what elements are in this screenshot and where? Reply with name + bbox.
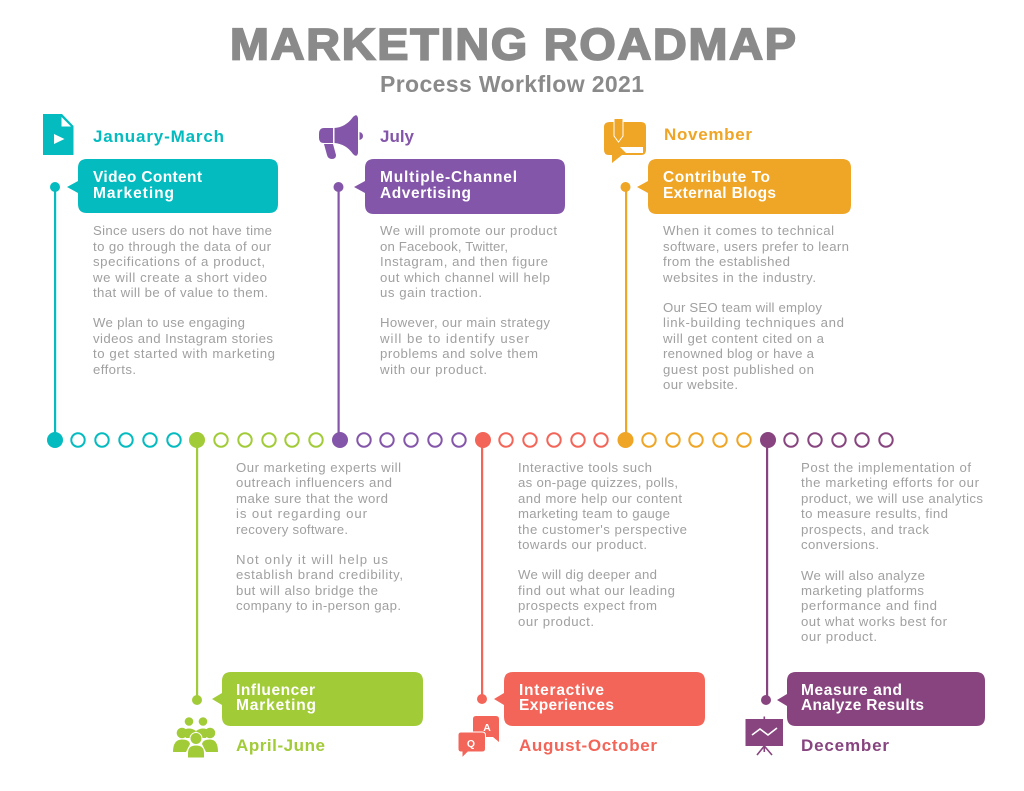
description text: However, our main strategy: [380, 315, 550, 330]
description text: is out regarding our: [236, 506, 368, 521]
panel: December: [746, 432, 985, 755]
description text: make sure that the word: [236, 491, 388, 506]
description text: [379, 223, 557, 377]
title bubble: Interactive: [519, 682, 604, 699]
description text: specifications of a product,: [93, 254, 265, 269]
description text: Our marketing experts will: [236, 460, 401, 475]
icon: video file: [43, 114, 74, 155]
panel: April-June: [173, 432, 423, 758]
description text: Since users do not have time: [93, 223, 272, 238]
panel: August-October: [458, 432, 705, 758]
title bubble: [354, 159, 565, 214]
description text: as on-page quizzes, polls,: [518, 475, 678, 490]
description text: Our SEO team will employ: [663, 300, 822, 315]
description text: prospects, and track: [801, 522, 929, 537]
panel: November: [604, 118, 851, 448]
month heading: July: [380, 127, 415, 146]
panel: July: [319, 115, 565, 448]
month heading: August-October: [519, 736, 657, 755]
month heading: April-June: [236, 736, 325, 755]
description text: product, we will use analytics: [801, 491, 983, 506]
description text: we will create a short video: [92, 270, 267, 285]
description text: efforts.: [93, 362, 136, 377]
title bubble: Contribute To: [663, 169, 770, 186]
description text: performance and find: [801, 598, 937, 613]
description text: videos and Instagram stories: [93, 331, 273, 346]
description text: to get started with marketing: [93, 346, 275, 361]
description text: We will dig deeper and: [518, 567, 657, 582]
title: MARKETING ROADMAP: [230, 20, 796, 69]
description text: link-building techniques and: [663, 315, 844, 330]
timeline dots: [71, 433, 893, 447]
title bubble: Marketing: [93, 185, 174, 202]
description text: prospects expect from: [518, 598, 657, 613]
description text: marketing platforms: [801, 583, 924, 598]
description text: websites in the industry.: [662, 270, 816, 285]
description text: Not only it will help us: [236, 552, 388, 567]
icon: book and pencil speech bubble: [604, 118, 646, 163]
description text: will get content cited on a: [662, 331, 825, 346]
description text: from the established: [663, 254, 790, 269]
timeline connector: January-March: [47, 182, 63, 448]
description text: Post the implementation of: [801, 460, 971, 475]
description text: the customer's perspective: [518, 522, 687, 537]
icon: megaphone: [319, 115, 363, 159]
title bubble: [777, 672, 985, 726]
title bubble: Marketing: [236, 697, 316, 714]
description text: towards our product.: [518, 537, 647, 552]
description text: that will be of value to them.: [93, 285, 268, 300]
title bubble: Influencer: [236, 682, 315, 699]
description text: guest post published on: [663, 362, 814, 377]
description text: and more help our content: [518, 491, 682, 506]
timeline connector: August-October: [475, 432, 491, 704]
title bubble: Analyze Results: [801, 697, 924, 714]
icon: Q and A speech bubbles: [458, 716, 499, 758]
description text: will be to identify user: [379, 331, 530, 346]
icon: group of people: [173, 717, 218, 758]
description text: We will also analyze: [801, 568, 925, 583]
description text: out what works best for: [801, 614, 948, 629]
icon: Q and A speech bubbles: Q: [467, 738, 475, 750]
month heading: November: [664, 125, 752, 144]
description text: our product.: [801, 629, 877, 644]
title bubble: Measure and: [801, 682, 902, 699]
icon: Q and A speech bubbles: A: [483, 722, 491, 734]
subtitle: Process Workflow 2021: [380, 71, 644, 97]
description text: find out what our leading: [518, 583, 675, 598]
description text: problems and solve them: [380, 346, 538, 361]
description text: renowned blog or have a: [663, 346, 815, 361]
timeline connector: July: [332, 182, 348, 448]
description text: on Facebook, Twitter,: [380, 239, 508, 254]
description text: software, users prefer to learn: [663, 239, 849, 254]
month heading: January-March: [93, 127, 224, 146]
title bubble: [212, 672, 423, 726]
description text: establish brand credibility,: [236, 567, 403, 582]
description text: [662, 223, 849, 392]
description text: us gain traction.: [380, 285, 482, 300]
timeline connector: November: [618, 182, 634, 448]
description text: company to in-person gap.: [236, 598, 401, 613]
description text: We plan to use engaging: [93, 315, 245, 330]
title bubble: Video Content: [93, 169, 202, 186]
description text: marketing team to gauge: [518, 506, 670, 521]
description text: We will promote our product: [380, 223, 557, 238]
description text: When it comes to technical: [663, 223, 834, 238]
description text: to go through the data of our: [93, 239, 272, 254]
title bubble: [67, 159, 278, 213]
icon: presentation board: [746, 716, 783, 755]
description text: the marketing efforts for our: [801, 475, 980, 490]
description text: Instagram, and then figure: [380, 254, 548, 269]
title bubble: [637, 159, 851, 214]
timeline connector: December: [760, 432, 776, 705]
description text: [236, 460, 403, 613]
title bubble: Experiences: [519, 697, 614, 714]
panel: January-March: [43, 114, 278, 448]
description text: recovery software.: [236, 522, 348, 537]
month heading: December: [801, 736, 889, 755]
description text: our website.: [663, 377, 738, 392]
title bubble: [494, 672, 705, 726]
description text: [518, 460, 687, 629]
description text: [92, 223, 275, 377]
description text: our product.: [518, 614, 594, 629]
title bubble: Advertising: [380, 185, 471, 202]
description text: with our product.: [379, 362, 487, 377]
timeline connector: April-June: [189, 432, 205, 705]
title bubble: External Blogs: [663, 185, 776, 202]
description text: [801, 460, 983, 644]
title bubble: Multiple-Channel: [380, 169, 517, 186]
description text: out which channel will help: [380, 270, 550, 285]
description text: but will also bridge the: [236, 583, 378, 598]
description text: outreach influencers and: [236, 475, 392, 490]
description text: Interactive tools such: [518, 460, 652, 475]
description text: conversions.: [801, 537, 879, 552]
description text: to measure results, find: [801, 506, 948, 521]
